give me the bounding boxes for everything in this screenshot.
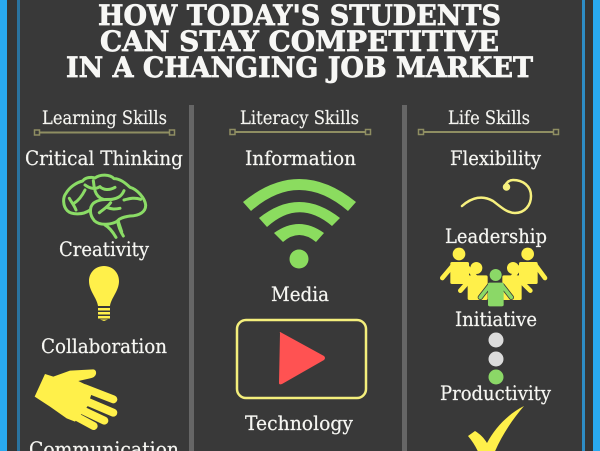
panel: life skills bbox=[418, 108, 558, 451]
heading: literacy skills: Literacy Skills bbox=[240, 108, 359, 129]
title bbox=[66, 0, 533, 84]
title: CAN STAY COMPETITIVE bbox=[100, 25, 499, 58]
heading: learning skills: Learning Skills bbox=[42, 108, 167, 129]
panel: learning skills bbox=[25, 108, 183, 451]
label: information: Information bbox=[245, 147, 356, 170]
label: leadership: Leadership bbox=[445, 225, 547, 248]
heading ornament: life skills bbox=[418, 130, 558, 134]
label: media: Media bbox=[271, 283, 329, 306]
label: critical thinking: Critical Thinking bbox=[25, 147, 183, 170]
icon: team of people bbox=[442, 248, 545, 306]
icon: video player bbox=[237, 320, 366, 398]
panel: literacy skills bbox=[230, 108, 370, 435]
label: creativity: Creativity bbox=[59, 238, 149, 261]
icon: swirl bbox=[462, 180, 531, 213]
icon: light bulb bbox=[89, 266, 119, 321]
label: flexibility: Flexibility bbox=[450, 147, 541, 170]
label: initiative: Initiative bbox=[455, 308, 537, 331]
icon: hand bbox=[35, 369, 113, 426]
icon: progress dots bbox=[488, 332, 504, 384]
icon: brain bbox=[64, 175, 146, 237]
heading: life skills: Life Skills bbox=[448, 108, 530, 129]
title: IN A CHANGING JOB MARKET bbox=[66, 51, 533, 84]
icon: wifi bbox=[243, 179, 356, 268]
heading ornament: literacy skills bbox=[230, 130, 370, 134]
label: productivity: Productivity bbox=[440, 382, 551, 405]
icon: check mark bbox=[468, 406, 524, 451]
heading ornament: learning skills bbox=[34, 130, 174, 135]
label: technology: Technology bbox=[245, 412, 353, 435]
label: collaboration: Collaboration bbox=[41, 335, 167, 358]
